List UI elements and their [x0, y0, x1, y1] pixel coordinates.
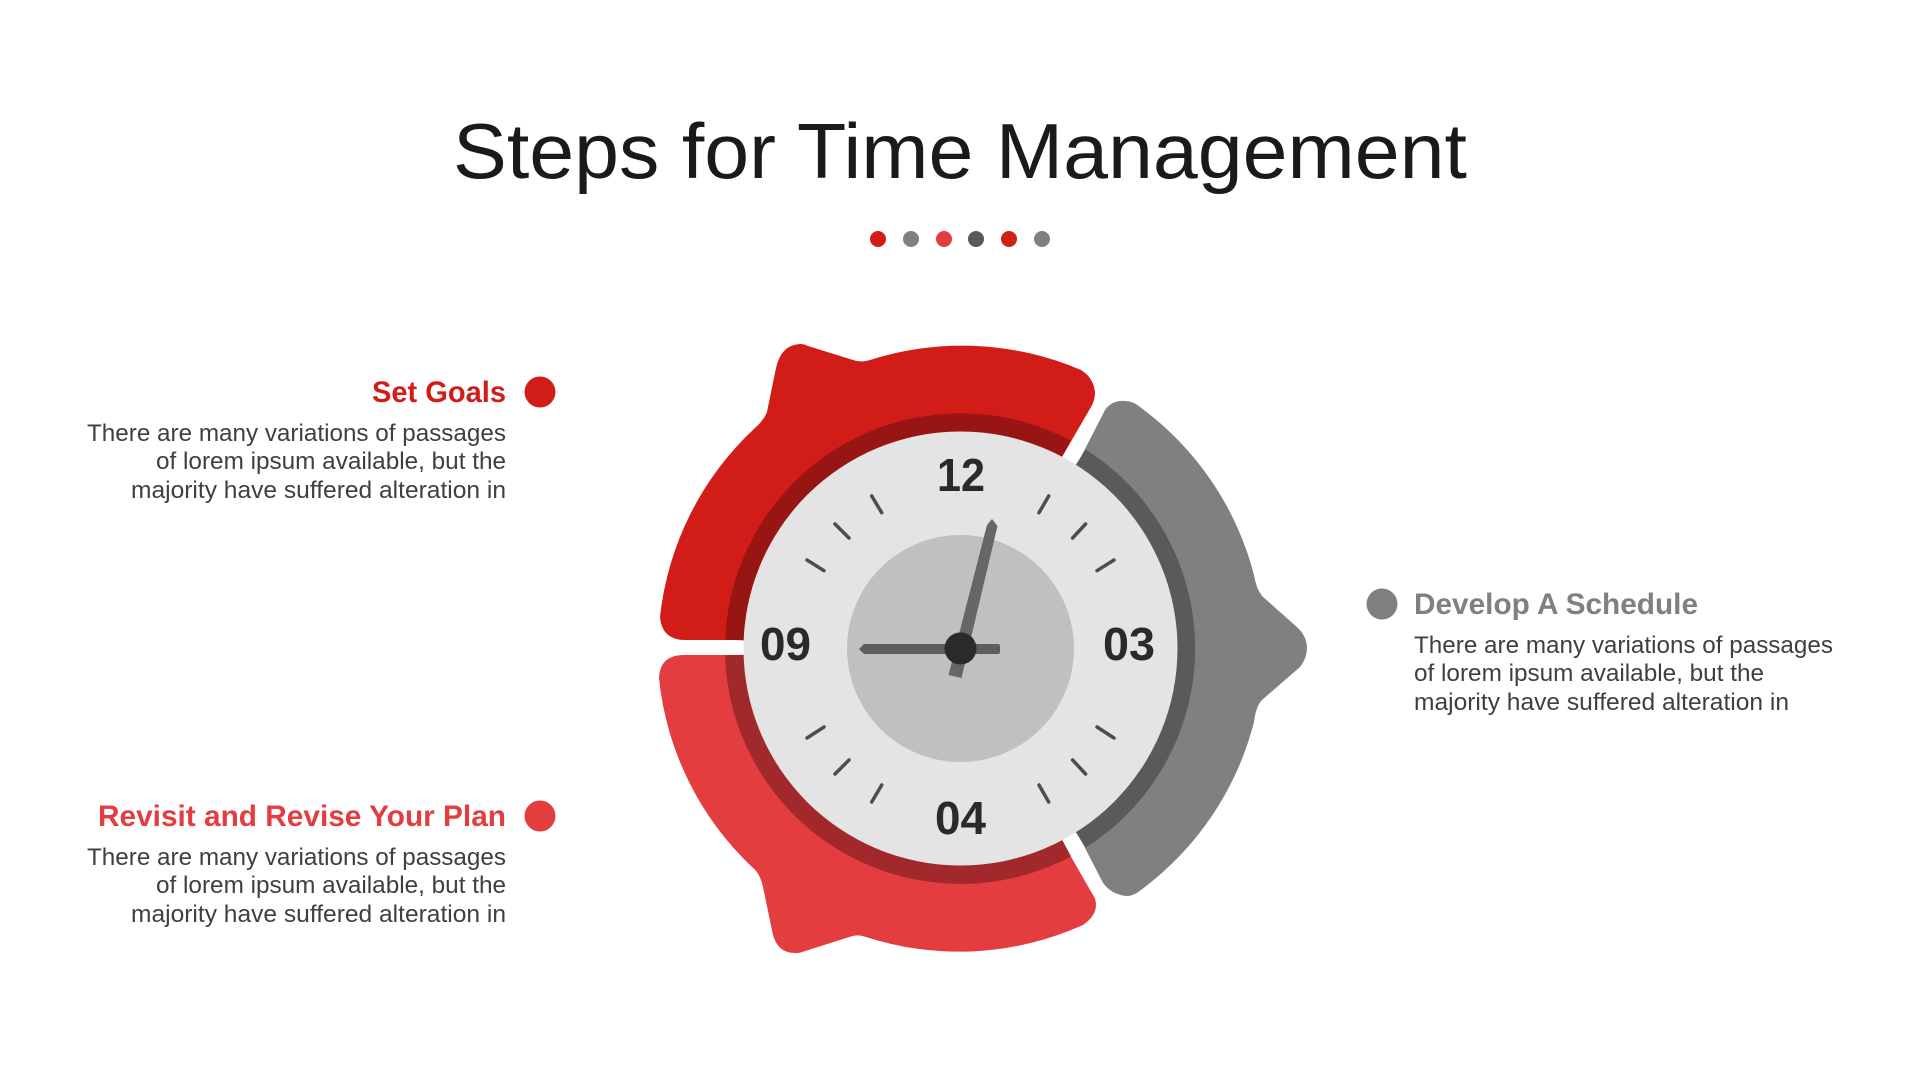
title: Steps for Time Management	[453, 107, 1467, 195]
heading: Set Goals	[372, 376, 506, 409]
body text	[1414, 632, 1833, 716]
segment: set goals red	[660, 344, 1095, 640]
step: develop a schedule	[1366, 588, 1833, 716]
minute hand	[948, 519, 998, 678]
body text: of lorem ipsum available, but the	[1414, 660, 1764, 687]
clock number 12: 12	[937, 449, 985, 501]
marker	[524, 376, 556, 408]
clock number 09: 09	[760, 618, 811, 670]
heading: Develop A Schedule	[1414, 588, 1698, 621]
segment: develop schedule gray	[1000, 401, 1307, 896]
body text	[87, 420, 506, 504]
clock face	[744, 432, 1178, 866]
body text	[87, 844, 506, 928]
ring: gray	[1080, 458, 1186, 840]
body text: majority have suffered alteration in	[131, 477, 506, 504]
tick marks	[807, 496, 1114, 802]
marker	[1366, 588, 1398, 620]
clock number 04: 04	[935, 792, 986, 844]
clock number 03: 03	[1103, 618, 1155, 670]
step: set goals	[87, 376, 556, 504]
marker	[524, 800, 556, 832]
decorative title dots	[870, 231, 1050, 247]
inner dial	[847, 535, 1074, 762]
segment: revisit light red	[659, 655, 1096, 953]
body text: There are many variations of passages	[87, 420, 506, 447]
body text: of lorem ipsum available, but the	[156, 872, 506, 899]
body text: There are many variations of passages	[87, 844, 506, 871]
center hub	[944, 632, 976, 664]
body text: majority have suffered alteration in	[131, 901, 506, 928]
heading: Revisit and Revise Your Plan	[98, 800, 506, 833]
ring: light red	[735, 655, 1066, 874]
hour hand	[859, 644, 1000, 654]
body text: majority have suffered alteration in	[1414, 689, 1789, 716]
ring: red	[735, 423, 1066, 640]
body text: There are many variations of passages	[1414, 632, 1833, 659]
step: revisit and revise your plan	[87, 800, 556, 928]
clock infographic	[659, 344, 1307, 953]
body text: of lorem ipsum available, but the	[156, 448, 506, 475]
